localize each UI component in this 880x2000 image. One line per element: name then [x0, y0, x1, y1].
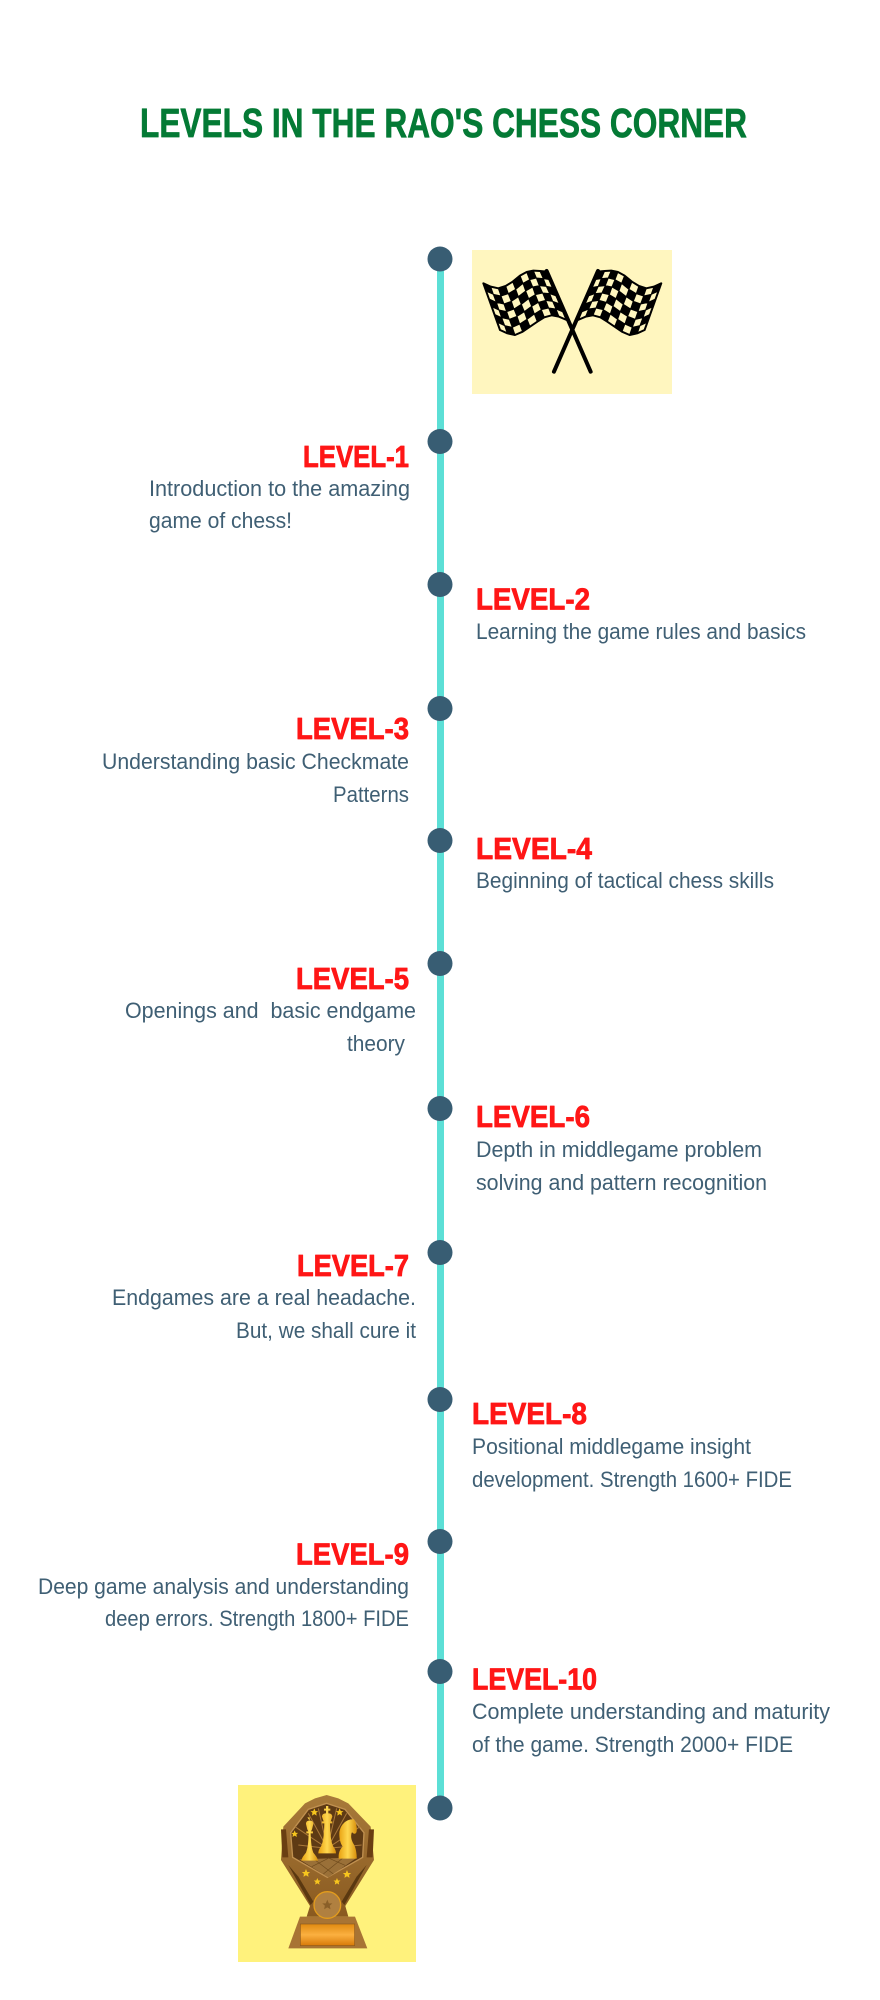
level 7 — [112, 1249, 416, 1343]
level 7: But, we shall cure it — [236, 1318, 416, 1343]
level 8: LEVEL-8 — [472, 1397, 587, 1431]
level 9 — [38, 1538, 409, 1631]
level 9: LEVEL-9 — [296, 1538, 409, 1572]
level 5: theory — [347, 1031, 405, 1056]
level 4 — [476, 832, 774, 893]
level 4: Beginning of tactical chess skills — [476, 868, 774, 893]
level 4: LEVEL-4 — [476, 832, 592, 866]
level 8 — [472, 1397, 792, 1492]
level 10: of the game. Strength 2000+ FIDE — [472, 1732, 793, 1757]
level 5 — [125, 962, 416, 1056]
level 2: LEVEL-2 — [476, 582, 590, 616]
timeline dots — [428, 246, 452, 1820]
level 3: Understanding basic Checkmate — [102, 749, 409, 774]
level 6: solving and pattern recognition — [476, 1170, 767, 1195]
level 6: LEVEL-6 — [476, 1100, 590, 1134]
level 3: LEVEL-3 — [296, 712, 409, 746]
level 6: Depth in middlegame problem — [476, 1137, 762, 1162]
level 2 — [476, 582, 806, 644]
level 9: deep errors. Strength 1800+ FIDE — [105, 1606, 409, 1631]
level 1: LEVEL-1 — [303, 440, 409, 474]
level 10: Complete understanding and maturity — [472, 1699, 830, 1724]
level 8: development. Strength 1600+ FIDE — [472, 1467, 792, 1492]
level 3 — [102, 712, 409, 807]
level 1: game of chess! — [149, 508, 292, 533]
level 6 — [476, 1100, 767, 1195]
level 1 — [149, 440, 410, 533]
icon: chess trophy — [238, 1785, 416, 1962]
level 5: LEVEL-5 — [296, 962, 409, 996]
level 7: LEVEL-7 — [297, 1249, 409, 1283]
level 2: Learning the game rules and basics — [476, 619, 806, 644]
level 7: Endgames are a real headache. — [112, 1285, 416, 1310]
level 10: LEVEL-10 — [472, 1662, 597, 1696]
level 10 — [472, 1662, 830, 1757]
level 1: Introduction to the amazing — [149, 476, 410, 501]
timeline line — [437, 259, 444, 1807]
icon: checkered flags — [472, 250, 672, 394]
level 8: Positional middlegame insight — [472, 1434, 751, 1459]
level 9: Deep game analysis and understanding — [38, 1574, 409, 1599]
level 5: Openings and basic endgame — [125, 998, 416, 1023]
level 3: Patterns — [333, 782, 409, 807]
